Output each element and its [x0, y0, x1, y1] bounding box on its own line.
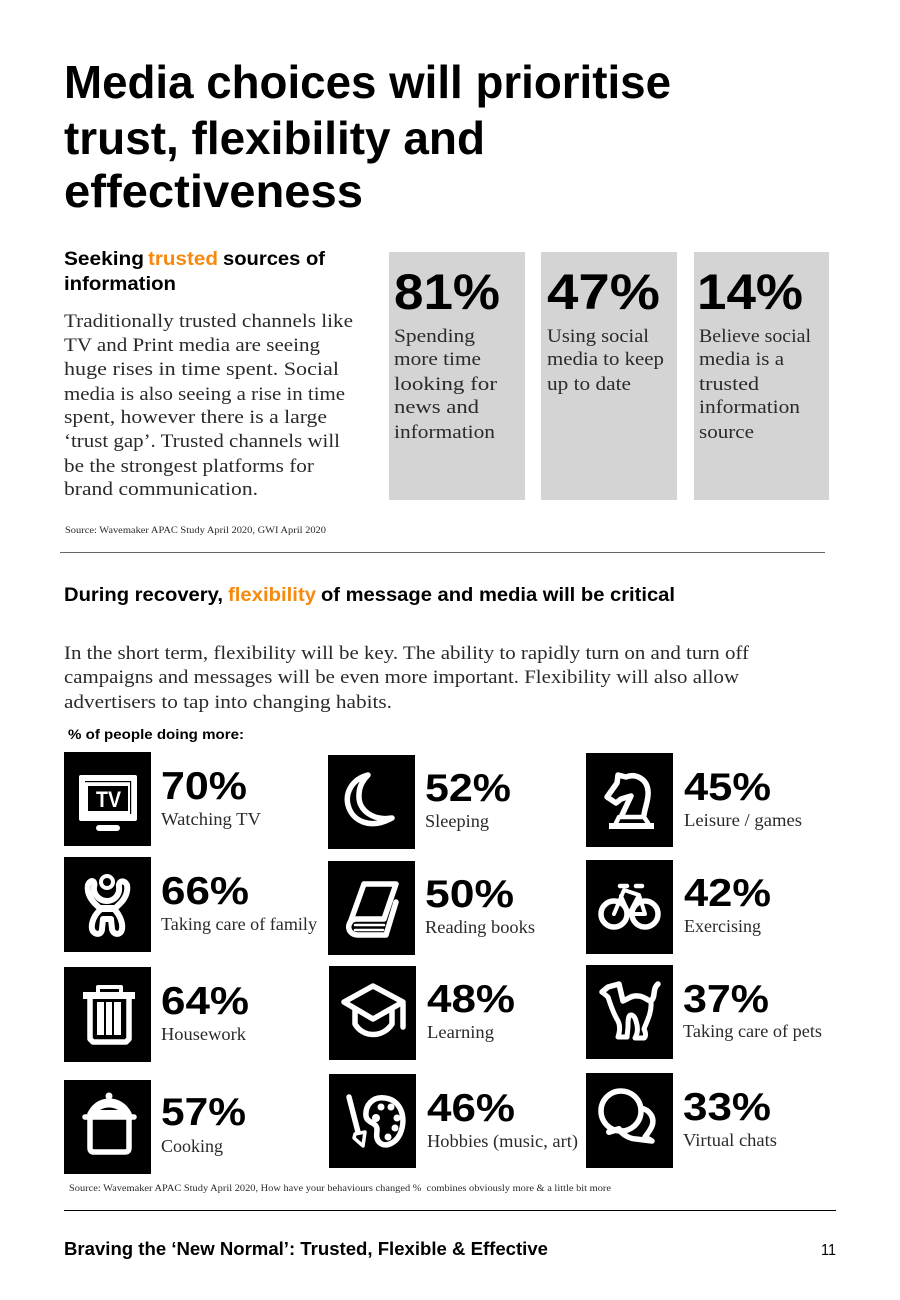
stat: hobbies [329, 1074, 578, 1168]
text block: trusted channels: Traditionally trusted channels like [64, 311, 353, 332]
stat: taking care of family: Taking care of family [161, 914, 317, 934]
stat card: 47%: 47% [547, 264, 660, 320]
stat: exercising: Exercising [684, 916, 761, 936]
stat: taking care of family: 66% [161, 870, 249, 913]
stat: reading books: Reading books [425, 917, 535, 937]
icon: television [64, 752, 151, 846]
stat card: 14%: source [699, 422, 754, 443]
stat: watching TV: 70% [161, 765, 247, 808]
text block: trusted channels: spent, however there is a large [64, 407, 327, 428]
heading: flexibility: of message and media will be critical [321, 585, 675, 606]
footer title: Braving the ‘New Normal’: Trusted, Flexible & Effective [64, 1239, 548, 1259]
stat card: 47%: media to keep [547, 349, 664, 370]
icon: pot [64, 1080, 151, 1174]
stat: housework: 64% [161, 980, 249, 1023]
title: effectiveness [64, 165, 363, 217]
stat card: 47%: Using social [547, 326, 649, 347]
stat: learning: Learning [427, 1022, 494, 1042]
stat card: 81%: more time [394, 349, 481, 370]
stat: reading books [328, 861, 535, 955]
heading: seeking trusted sources: sources of [223, 249, 326, 270]
heading: flexibility: During recovery, [64, 585, 223, 606]
stat: pets [586, 965, 822, 1059]
text block: trusted channels: be the strongest platforms for [64, 456, 315, 477]
text block: flexibility: advertisers to tap into changing habits. [64, 692, 392, 713]
text block: trusted channels: ‘trust gap’. Trusted channels will [64, 431, 340, 452]
stat card: 14% [694, 252, 829, 500]
stat: housework [64, 967, 249, 1062]
title: Media choices will prioritise [64, 56, 671, 108]
heading: seeking trusted sources: trusted [148, 249, 218, 270]
icon: child figure [64, 857, 151, 952]
text block: trusted channels: huge rises in time spent. Social [64, 359, 339, 380]
stat: sleeping: Sleeping [425, 811, 489, 831]
heading: seeking trusted sources [64, 249, 326, 295]
stat: sleeping [328, 755, 511, 849]
stat: pets: Taking care of pets [683, 1021, 822, 1041]
stat card: 47% [541, 252, 677, 500]
stat card: 47%: up to date [547, 374, 631, 395]
icon: book [328, 861, 415, 955]
stat: virtual chats: Virtual chats [683, 1130, 777, 1150]
text block: trusted channels: TV and Print media are seeing [64, 335, 321, 356]
stat: leisure: Leisure / games [684, 810, 802, 830]
text block: trusted channels [64, 311, 353, 500]
panel: seeking trusted sources [64, 249, 353, 535]
icon: bicycle [586, 860, 673, 954]
stat card: 81%: Spending [394, 326, 476, 347]
icon: palette and brush [329, 1074, 416, 1168]
stat: learning [329, 966, 515, 1060]
stat: housework: Housework [161, 1024, 246, 1044]
source note: trust: Source: Wavemaker APAC Study April 2020, GWI April 2020 [65, 525, 327, 535]
source note: behaviours: Source: Wavemaker APAC Study April 2020, How have your behaviours changed % combines obviously more & a little bit more [69, 1183, 611, 1193]
stat: taking care of family [64, 857, 317, 952]
icon: bin [64, 967, 151, 1062]
stat: sleeping: 52% [425, 767, 511, 810]
stat card: 81% [389, 252, 525, 500]
stat: leisure: 45% [684, 766, 771, 809]
text block: flexibility [64, 643, 750, 713]
stat: cooking: Cooking [161, 1136, 223, 1156]
stat: exercising: 42% [684, 872, 771, 915]
stat: watching TV: Watching TV [161, 809, 261, 829]
title: trust, flexibility and [64, 112, 485, 164]
stat: cooking [64, 1080, 246, 1174]
stat card: 81%: news and [394, 397, 480, 418]
stat: hobbies: Hobbies (music, art) [427, 1131, 578, 1152]
stat: cooking: 57% [161, 1091, 246, 1134]
stat: exercising [586, 860, 771, 954]
stat card: 14%: 14% [697, 264, 803, 320]
stat: hobbies: 46% [427, 1087, 515, 1130]
stat card: 14%: trusted [699, 374, 760, 395]
text block: flexibility: campaigns and messages will be even more important. Flexibility will also allow [64, 667, 739, 688]
stat card: 14%: media is a [699, 349, 785, 370]
stat: reading books: 50% [425, 873, 514, 916]
heading: seeking trusted sources: Seeking [64, 249, 144, 270]
stat: learning: 48% [427, 978, 515, 1021]
icon: crescent moon [328, 755, 415, 849]
stat: pets: 37% [683, 978, 769, 1021]
title [64, 56, 671, 217]
chart label: % of people doing more: [68, 726, 244, 742]
stat card: 14%: information [699, 397, 801, 418]
heading: seeking trusted sources: information [64, 274, 176, 295]
stat: virtual chats [586, 1073, 777, 1168]
heading: flexibility [64, 585, 675, 606]
stat card: 81%: 81% [394, 264, 500, 320]
icon: chess knight [586, 753, 673, 847]
stat: virtual chats: 33% [683, 1086, 771, 1129]
stat card: 81%: information [394, 422, 496, 443]
page number: 11 [821, 1242, 836, 1259]
stat card: 81%: looking for [394, 374, 498, 395]
text block: trusted channels: media is also seeing a rise in time [64, 384, 345, 405]
text block: flexibility: In the short term, flexibility will be key. The ability to rapidly turn on and turn off [64, 643, 750, 664]
icon: graduation cap [329, 966, 416, 1060]
stat card: 14%: Believe social [699, 326, 811, 347]
icon: speech bubbles [586, 1073, 673, 1168]
icon: television: TV [96, 787, 121, 812]
heading: flexibility: flexibility [228, 585, 316, 606]
text block: trusted channels: brand communication. [64, 479, 258, 500]
stat: watching TV [64, 752, 261, 846]
stat: leisure [586, 753, 802, 847]
icon: cat [586, 965, 673, 1059]
